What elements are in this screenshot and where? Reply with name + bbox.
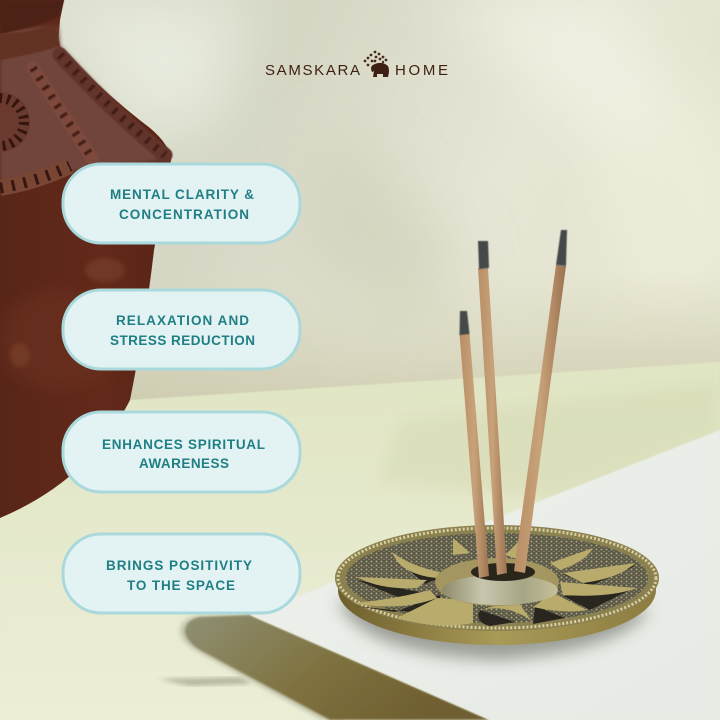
terracotta vase (0, 0, 171, 518)
ray shadows (355, 556, 635, 626)
benefit pill: relaxation: STRESS REDUCTION (110, 333, 255, 348)
brass dish shadow (338, 600, 650, 660)
benefit pill: spiritual awareness: AWARENESS (139, 456, 229, 471)
rosette (0, 92, 30, 152)
left stick (460, 333, 489, 578)
brass sun incense holder (335, 525, 659, 645)
rope: inner (33, 68, 92, 158)
table shadow band (380, 380, 720, 500)
benefit pill: positivity: TO THE SPACE (127, 578, 235, 593)
small floor shadow (158, 677, 252, 686)
benefit pill: relaxation (63, 290, 300, 369)
logo: HOME (395, 62, 448, 79)
floor surface (0, 362, 720, 720)
logo (265, 51, 448, 79)
benefit pill: positivity (63, 534, 300, 613)
marble slab (250, 430, 720, 720)
right stick (514, 265, 566, 573)
benefit pill: relaxation: RELAXATION AND (116, 313, 249, 328)
dish base rim (338, 535, 656, 645)
benefit pill: spiritual awareness (63, 412, 300, 492)
lower band (0, 166, 70, 188)
central dome (435, 558, 559, 606)
icon: tree and elephant (364, 51, 389, 77)
benefit pill: mental clarity (63, 164, 300, 243)
sun rays (353, 538, 637, 626)
middle stick (478, 268, 507, 575)
table shadow (180, 615, 490, 720)
dish top (335, 525, 659, 631)
benefit pill: mental clarity: MENTAL CLARITY & (110, 187, 254, 202)
rope: outer (60, 55, 165, 155)
benefit pill: spiritual awareness: ENHANCES SPIRITUAL (102, 437, 265, 452)
incense sticks (460, 230, 567, 578)
logo: SAMSKARA (265, 62, 360, 79)
benefit pill: positivity: BRINGS POSITIVITY (106, 558, 252, 573)
benefit pill: mental clarity: CONCENTRATION (119, 207, 249, 222)
wall background (0, 0, 720, 420)
